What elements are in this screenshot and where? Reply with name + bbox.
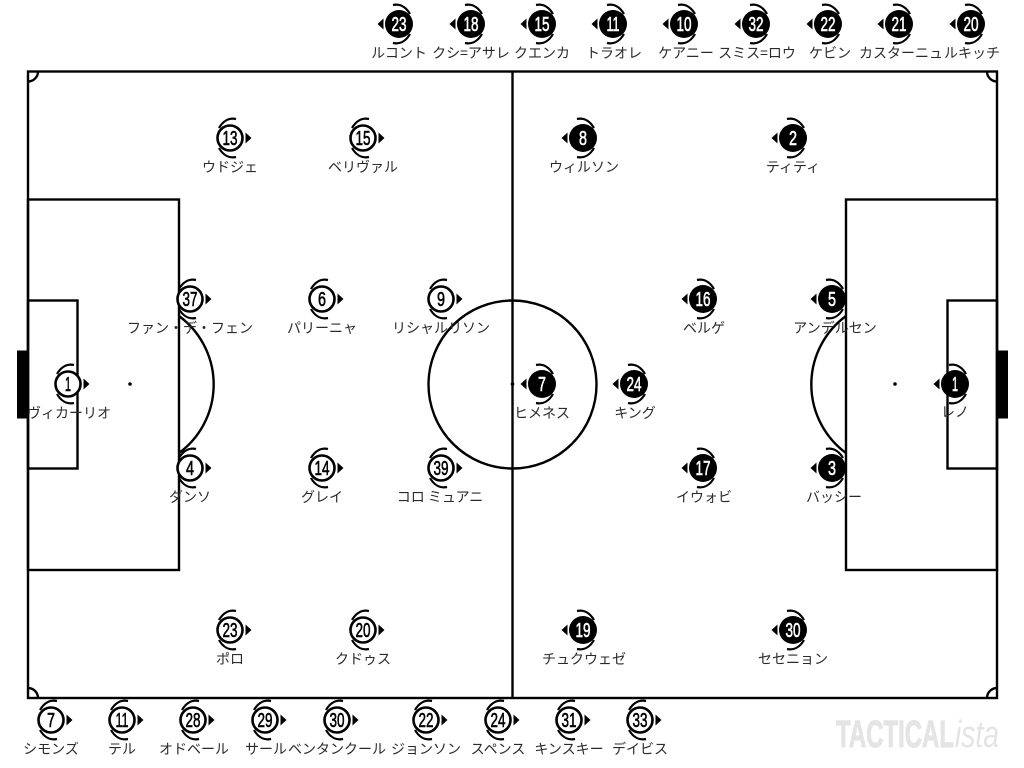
player 5 アンデルセン: アンデルセン: [793, 318, 877, 338]
player 30 セセニョン: [758, 611, 828, 669]
sub 11 テル: [108, 701, 144, 759]
away team starting eleven: [514, 119, 969, 669]
sub 11 トラオレ: トラオレ: [586, 43, 642, 63]
player 8 ウィルソン: 8: [579, 128, 587, 150]
sub 10 ケアニー: [658, 5, 714, 63]
player 19 チュクウェゼ: チュクウェゼ: [542, 649, 626, 669]
player 3 バッシー: バッシー: [806, 487, 862, 507]
player 1 レノ: レノ: [941, 402, 969, 422]
sub 11 トラオレ: [586, 5, 642, 63]
sub 22 ジョンソン: [391, 701, 461, 759]
sub 18 クシ=アサレ: クシ=アサレ: [432, 43, 510, 63]
sub 22 ケビン: 22: [820, 14, 836, 36]
player 15 ベリヴァル: 15: [356, 128, 370, 150]
player 3 バッシー: 3: [828, 458, 836, 480]
player 24 キング: [612, 365, 656, 423]
player 24 キング: キング: [614, 403, 656, 423]
player 4 ダンソ: 4: [186, 458, 194, 480]
player 20 クドゥス: 20: [356, 620, 370, 642]
halfway line: [511, 72, 514, 698]
player 4 ダンソ: [169, 449, 212, 507]
player 2 ティティ: [766, 119, 820, 177]
player 1 ヴィカーリオ: 1: [65, 374, 71, 396]
sub 31 キンスキー: キンスキー: [534, 739, 604, 759]
sub 7 シモンズ: [23, 701, 79, 759]
sub 29 サール: サール: [245, 739, 287, 759]
player 7 ヒメネス: ヒメネス: [514, 403, 570, 423]
left penalty arc: [179, 316, 214, 453]
player 1 レノ: 1: [952, 374, 958, 396]
player 23 ポロ: ポロ: [216, 649, 244, 669]
sub 31 キンスキー: 31: [562, 710, 576, 732]
player 15 ベリヴァル: [328, 119, 398, 177]
home team substitutes: [23, 701, 668, 759]
sub 7 シモンズ: シモンズ: [23, 739, 79, 759]
player 6 パリーニャ: [287, 280, 357, 338]
sub 10 ケアニー: ケアニー: [658, 43, 714, 63]
player 1 ヴィカーリオ: [27, 365, 111, 423]
watermark logo: ista: [955, 714, 999, 756]
sub 11 トラオレ: 11: [606, 14, 620, 36]
player 17 イウォビ: 17: [696, 458, 710, 480]
player 13 ウドジェ: ウドジェ: [202, 157, 258, 177]
player 37 ファン・デ・フェン: [127, 280, 253, 338]
sub 28 オドベール: 28: [186, 710, 200, 732]
player 17 イウォビ: イウォビ: [676, 487, 732, 507]
sub 24 スペンス: [471, 701, 525, 759]
player 6 パリーニャ: パリーニャ: [287, 318, 357, 338]
right goal area: [948, 300, 997, 468]
player 7 ヒメネス: 7: [538, 374, 546, 396]
right penalty arc: [811, 316, 846, 453]
away team substitutes: [371, 5, 1000, 63]
left goal area: [28, 300, 78, 468]
player 39 コロ ミュアニ: 39: [434, 458, 448, 480]
sub 22 ケビン: [806, 5, 851, 63]
sub 18 クシ=アサレ: [432, 5, 510, 63]
sub 24 スペンス: 24: [490, 710, 506, 732]
sub 15 クエンカ: クエンカ: [514, 43, 570, 63]
player 6 パリーニャ: 6: [318, 289, 326, 311]
sub 23 ルコント: 23: [392, 14, 406, 36]
player 39 コロ ミュアニ: [397, 449, 483, 507]
sub 22 ジョンソン: 22: [418, 710, 434, 732]
player 23 ポロ: 23: [222, 620, 238, 642]
sub 32 スミス=ロウ: [718, 5, 796, 63]
player 8 ウィルソン: [549, 119, 619, 177]
home team starting eleven: [27, 119, 490, 669]
sub 20 ルキッチ: 20: [964, 14, 978, 36]
sub 20 ルキッチ: ルキッチ: [944, 43, 1000, 63]
corner arcs: [28, 72, 997, 698]
sub 23 ルコント: [371, 5, 427, 63]
player 13 ウドジェ: 13: [222, 128, 238, 150]
sub 32 スミス=ロウ: 32: [748, 14, 764, 36]
player 16 ベルゲ: ベルゲ: [683, 318, 725, 338]
player 3 バッシー: [806, 449, 862, 507]
sub 30 ベンタンクール: ベンタンクール: [288, 739, 386, 759]
sub 33 デイビス: 33: [632, 710, 648, 732]
player 1 ヴィカーリオ: ヴィカーリオ: [27, 403, 111, 423]
player 14 グレイ: 14: [314, 458, 330, 480]
sub 15 クエンカ: [514, 5, 570, 63]
sub 22 ジョンソン: ジョンソン: [391, 739, 461, 759]
sub 33 デイビス: [612, 701, 668, 759]
sub 7 シモンズ: 7: [47, 710, 55, 732]
player 24 キング: 24: [626, 374, 642, 396]
sub 30 ベンタンクール: [288, 701, 386, 759]
sub 21 カスターニュ: 21: [892, 14, 906, 36]
sub 29 サール: 29: [258, 710, 272, 732]
player 37 ファン・デ・フェン: ファン・デ・フェン: [127, 318, 253, 338]
right penalty box: [846, 200, 997, 570]
sub 24 スペンス: スペンス: [471, 739, 525, 759]
left goal: [17, 350, 28, 418]
pitch: [28, 72, 997, 698]
player 8 ウィルソン: ウィルソン: [549, 157, 619, 177]
player 2 ティティ: ティティ: [766, 157, 820, 177]
player 4 ダンソ: ダンソ: [169, 487, 211, 507]
pitch spots: [128, 382, 897, 386]
player 14 グレイ: グレイ: [301, 487, 343, 507]
player 15 ベリヴァル: ベリヴァル: [328, 157, 398, 177]
sub 28 オドベール: [159, 701, 229, 759]
sub 20 ルキッチ: [944, 5, 1000, 63]
player 37 ファン・デ・フェン: 37: [182, 289, 198, 311]
player 39 コロ ミュアニ: コロ ミュアニ: [397, 487, 483, 507]
player 5 アンデルセン: [793, 280, 877, 338]
watermark logo: TACTICAL: [836, 714, 954, 756]
player 20 クドゥス: [335, 611, 391, 669]
sub 10 ケアニー: 10: [676, 14, 692, 36]
player 14 グレイ: [301, 449, 344, 507]
player 1 レノ: [934, 365, 969, 422]
sub 18 クシ=アサレ: 18: [464, 14, 478, 36]
sub 22 ケビン: ケビン: [809, 43, 851, 63]
player 9 リシャルリソン: [392, 280, 490, 338]
sub 28 オドベール: オドベール: [159, 739, 229, 759]
player 7 ヒメネス: [514, 365, 570, 423]
sub 21 カスターニュ: カスターニュ: [859, 43, 943, 63]
sub 31 キンスキー: [534, 701, 604, 759]
player 5 アンデルセン: 5: [828, 289, 836, 311]
right goal: [997, 350, 1008, 418]
player 23 ポロ: [216, 611, 252, 669]
player 17 イウォビ: [676, 449, 732, 507]
sub 21 カスターニュ: [859, 5, 943, 63]
sub 15 クエンカ: 15: [534, 14, 550, 36]
sub 11 テル: 11: [116, 710, 128, 732]
player 30 セセニョン: 30: [786, 620, 800, 642]
player 13 ウドジェ: [202, 119, 258, 177]
player 9 リシャルリソン: リシャルリソン: [392, 318, 490, 338]
sub 29 サール: [245, 701, 287, 759]
pitch outline: [28, 72, 997, 698]
player 30 セセニョン: セセニョン: [758, 649, 828, 669]
player 16 ベルゲ: 16: [696, 289, 710, 311]
player 9 リシャルリソン: 9: [437, 289, 445, 311]
player 19 チュクウェゼ: [542, 611, 626, 669]
left penalty box: [28, 200, 179, 570]
player 20 クドゥス: クドゥス: [335, 649, 391, 669]
sub 32 スミス=ロウ: スミス=ロウ: [718, 43, 796, 63]
sub 23 ルコント: ルコント: [371, 43, 427, 63]
sub 30 ベンタンクール: 30: [330, 710, 344, 732]
sub 11 テル: テル: [108, 739, 136, 759]
player 16 ベルゲ: [682, 280, 725, 338]
player 2 ティティ: 2: [789, 128, 797, 150]
sub 33 デイビス: デイビス: [612, 739, 668, 759]
player 19 チュクウェゼ: 19: [576, 620, 590, 642]
centre circle: [428, 300, 596, 468]
